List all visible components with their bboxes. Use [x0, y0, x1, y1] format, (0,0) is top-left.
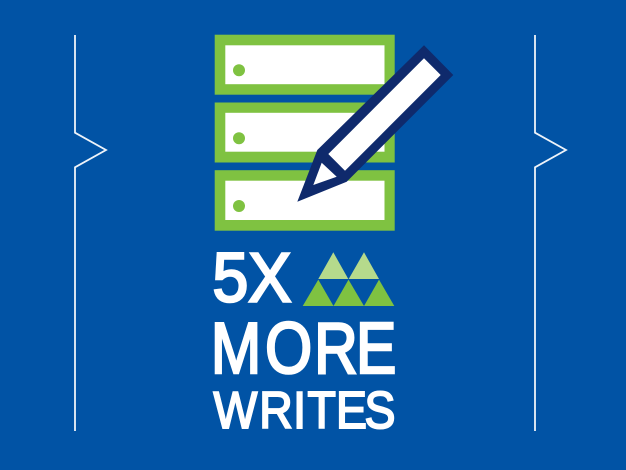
- icon: pencil: [297, 45, 453, 202]
- heading: WRITES: WRITES: [213, 383, 395, 440]
- server row 1: [215, 35, 395, 95]
- icon: server stack: [215, 35, 395, 231]
- left bracket line: [75, 35, 106, 431]
- server row 2: [215, 102, 395, 162]
- right bracket line: [535, 35, 566, 431]
- icon: triangle logo: [303, 252, 394, 306]
- heading: 5X: 5X: [213, 239, 291, 317]
- server row 3: [215, 170, 395, 231]
- heading: MORE: MORE: [211, 309, 396, 389]
